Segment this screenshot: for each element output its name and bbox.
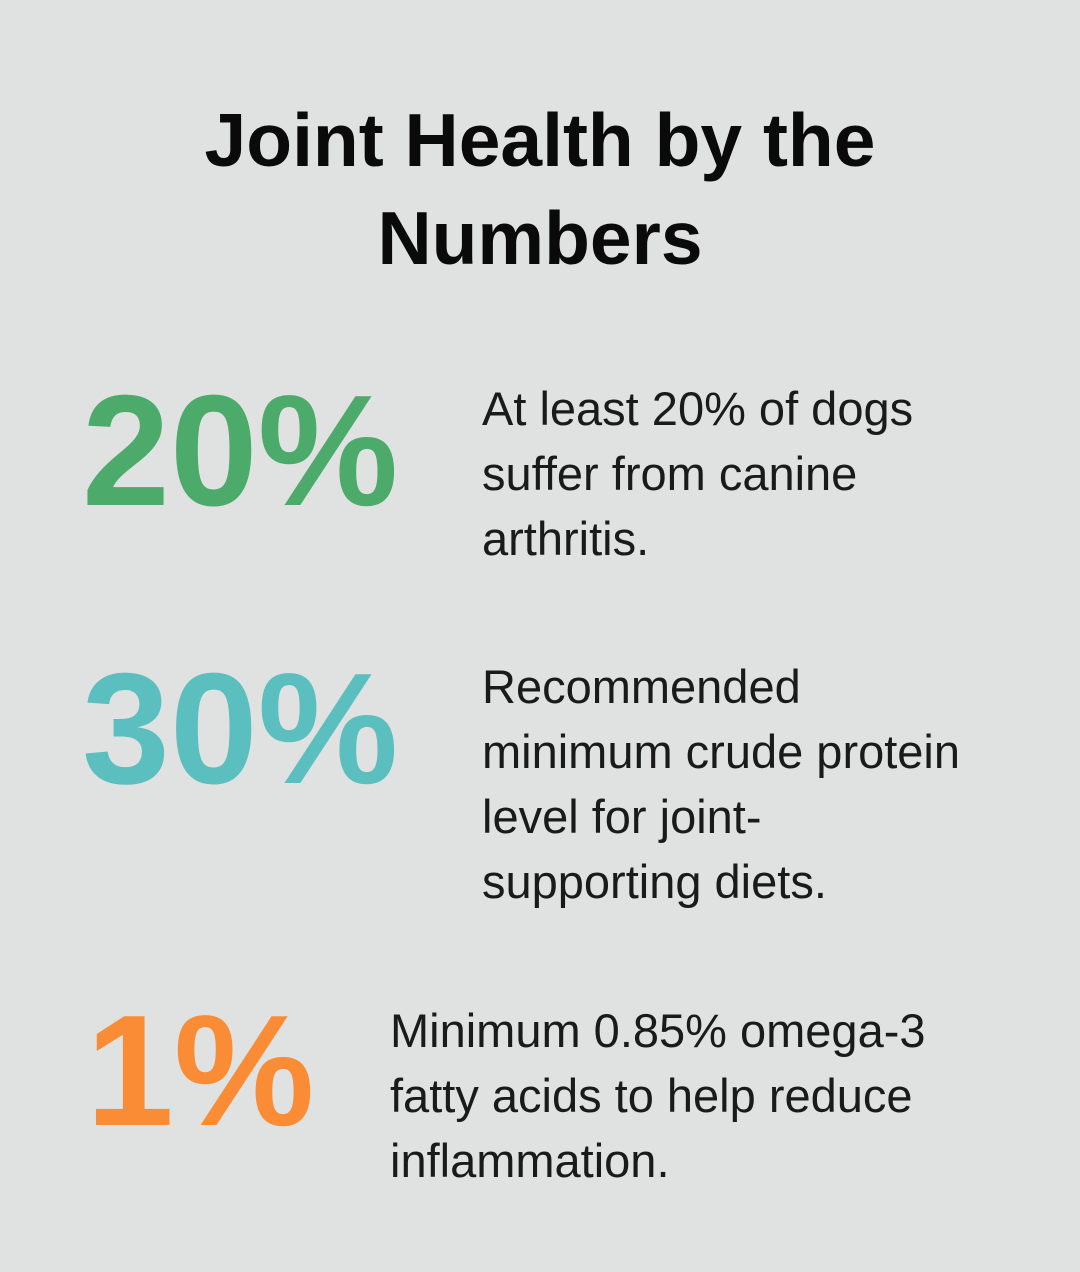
text: omega-3: Minimum 0.85% omega-3 [390, 1004, 926, 1057]
stat: 20%: 20% [82, 363, 398, 539]
title: Numbers [377, 196, 703, 280]
text: arthritis [482, 382, 913, 565]
text: protein: supporting diets. [482, 855, 827, 908]
stat: 1%: 1% [86, 983, 314, 1159]
text: arthritis: suffer from canine [482, 447, 857, 500]
text: protein: level for joint- [482, 790, 762, 843]
text: omega-3: inflammation. [390, 1134, 670, 1187]
text: protein: Recommended [482, 660, 801, 713]
title [205, 98, 875, 280]
text: protein: minimum crude protein [482, 725, 960, 778]
text: omega-3 [390, 1004, 926, 1187]
text: arthritis: arthritis. [482, 512, 649, 565]
text: protein [482, 660, 960, 908]
text: omega-3: fatty acids to help reduce [390, 1069, 913, 1122]
title: Joint Health by the [205, 98, 875, 182]
text: arthritis: At least 20% of dogs [482, 382, 913, 435]
stat: 30%: 30% [82, 641, 398, 817]
